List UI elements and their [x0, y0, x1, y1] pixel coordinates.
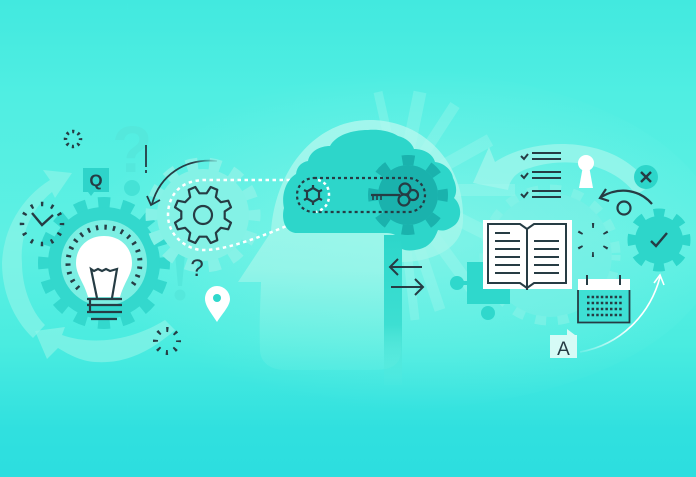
white curved arrow — [580, 275, 664, 352]
clock icon — [22, 204, 62, 244]
x badge — [634, 165, 658, 189]
circular arrows around bulb gear — [2, 170, 175, 362]
burst icon top left — [66, 132, 80, 146]
curved arrow — [147, 161, 217, 205]
lightbulb glass — [76, 236, 132, 297]
key icon — [371, 184, 418, 206]
Q box — [83, 168, 109, 196]
large light question mark: ? — [112, 112, 152, 186]
light gear behind settings icon — [152, 164, 254, 266]
map pin — [205, 286, 230, 322]
small question mark: ? — [190, 255, 204, 282]
circle O — [618, 202, 630, 214]
small dashed white arc — [316, 180, 329, 212]
burst icon bottom — [156, 330, 178, 352]
filament and base — [87, 269, 122, 319]
head silhouette — [238, 120, 463, 370]
calendar — [578, 275, 630, 323]
burst icon right — [578, 226, 608, 254]
brain gear — [373, 160, 443, 230]
settings gear outline — [175, 187, 231, 243]
brain sun icon — [304, 185, 322, 205]
large light arc arrow on right — [473, 144, 650, 195]
swap arrows — [390, 259, 423, 295]
light question dot — [124, 180, 140, 196]
dashed pill outline — [297, 178, 425, 212]
central glow — [60, 70, 696, 410]
white dashed connector — [168, 180, 318, 250]
large light gear behind book — [484, 189, 616, 321]
light exclamation mark — [174, 254, 186, 300]
A box: A — [557, 339, 570, 360]
open book — [483, 220, 572, 290]
gear inner ring — [61, 220, 147, 306]
light rays behind brain — [378, 92, 515, 320]
puzzle piece — [450, 262, 510, 320]
Q box: Q — [89, 171, 103, 190]
large gear behind bulb — [44, 203, 164, 323]
check gear — [632, 214, 686, 266]
checklist — [521, 153, 561, 197]
exclamation mark dark — [145, 145, 147, 173]
neck — [384, 235, 402, 385]
bulb rays — [68, 227, 140, 288]
keyhole — [578, 155, 594, 188]
brain — [283, 130, 460, 250]
check mark — [651, 233, 667, 246]
curved arrow back — [600, 189, 652, 204]
A box — [550, 329, 577, 360]
